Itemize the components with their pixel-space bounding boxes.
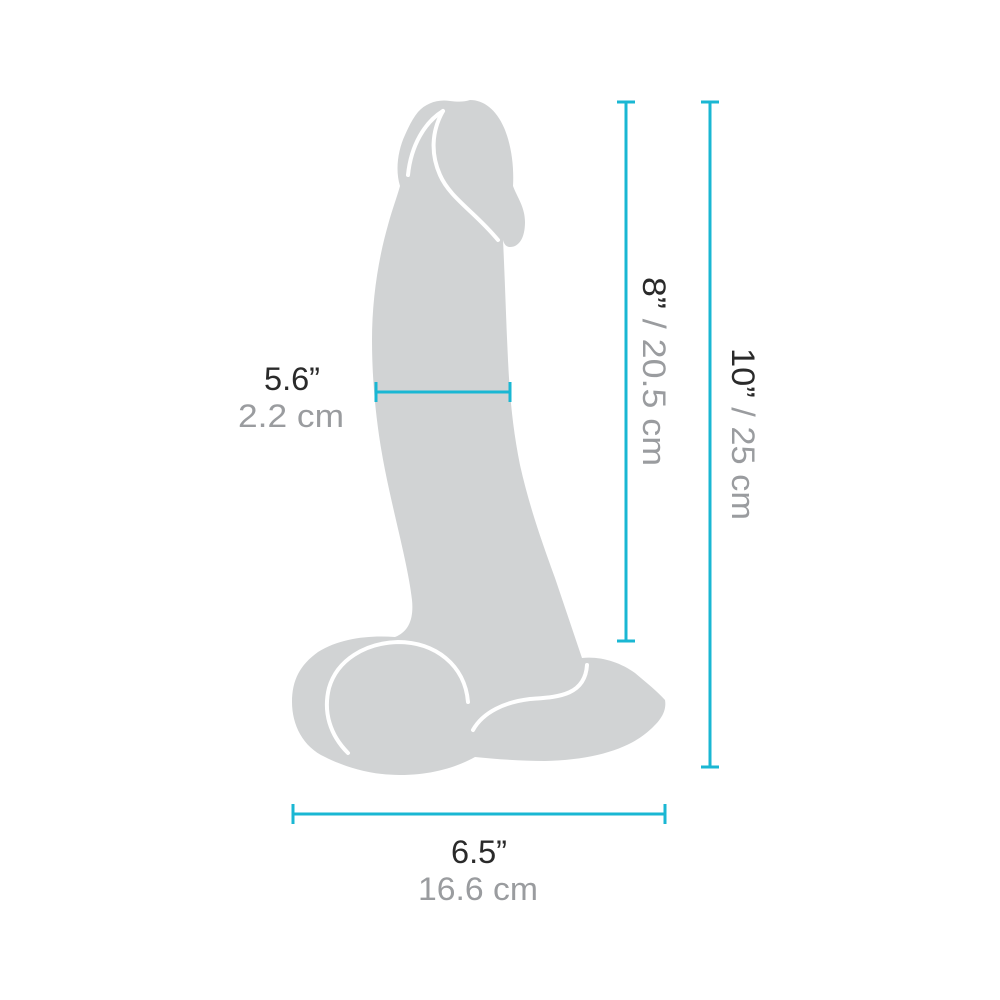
dimension line: width across middle	[376, 382, 510, 402]
label: 6.5 inch	[418, 834, 538, 907]
label: 5.6 inch: 2.2 cm	[238, 398, 344, 434]
detail line: lower right curve	[473, 665, 587, 730]
dimension line: base width	[293, 804, 665, 824]
dimension line: 8 inch height	[617, 102, 635, 641]
product silhouette	[292, 100, 665, 775]
detail line: upper left curve	[408, 111, 443, 175]
label: 6.5 inch: 16.6 cm	[418, 871, 538, 907]
label: 5.6 inch	[238, 361, 344, 434]
detail line: upper centre curve	[434, 111, 498, 240]
dimension line: 10 inch height	[701, 102, 719, 767]
detail line: lower left arc	[327, 642, 468, 753]
label: 8 inch / 20.5 cm: 8” / 20.5 cm	[636, 277, 672, 466]
label: 10 inch / 25 cm: 10” / 25 cm	[725, 348, 761, 520]
label: 5.6 inch: 5.6”	[264, 361, 320, 397]
label: 6.5 inch: 6.5”	[451, 834, 507, 870]
